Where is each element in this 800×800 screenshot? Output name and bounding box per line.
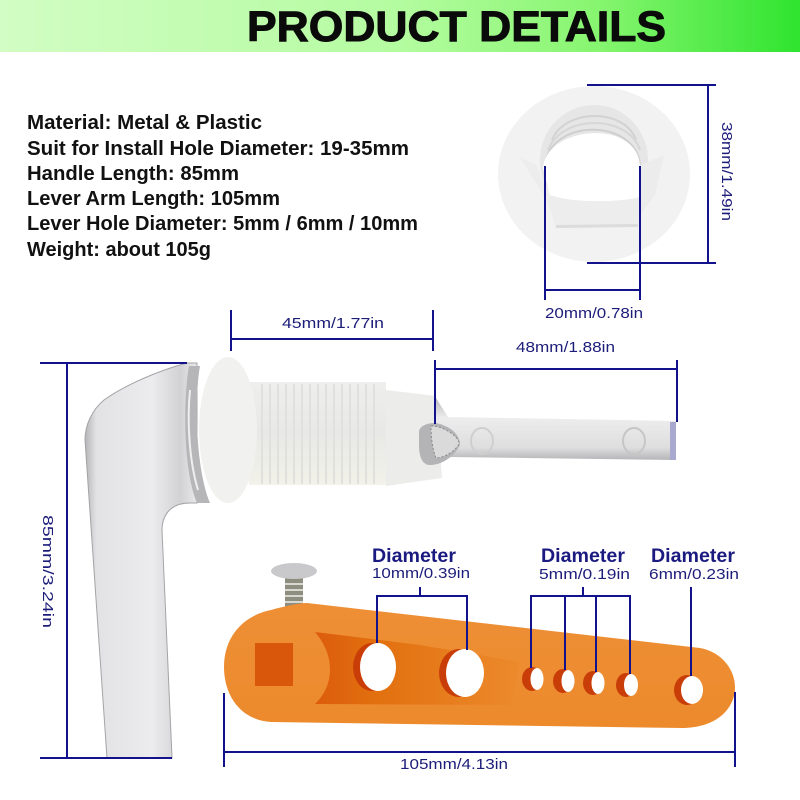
- specification list: Material: Metal & Plastic: [27, 112, 262, 134]
- dimension: nut height: [587, 85, 735, 263]
- label: 10mm holes: 10mm/0.39in: [372, 565, 470, 582]
- header band: [0, 0, 800, 52]
- label: 10mm holes: [372, 546, 470, 650]
- dimension: shaft length: [435, 339, 677, 424]
- dimension: nut height: 38mm/1.49in: [718, 122, 735, 221]
- dimension: lever arm length: 105mm/4.13in: [400, 756, 508, 773]
- dimension: tube length: 45mm/1.77in: [282, 315, 384, 332]
- label: 5mm holes: Diameter: [541, 546, 626, 567]
- specification list: [27, 112, 418, 261]
- dimension: nut hole: [545, 166, 643, 322]
- dimension: nut hole: 20mm/0.78in: [545, 305, 643, 322]
- threaded white tube: [199, 357, 442, 503]
- dimension: lever arm length: [224, 692, 735, 773]
- chrome handle: [85, 363, 210, 758]
- label: 5mm holes: 5mm/0.19in: [539, 566, 630, 583]
- specification list: Weight: about 105g: [27, 239, 211, 261]
- specification list: Lever Arm Length: 105mm: [27, 188, 280, 210]
- metal shaft: [419, 398, 676, 465]
- dimension: handle length: 85mm/3.24in: [39, 515, 56, 628]
- dimension: shaft length: 48mm/1.88in: [516, 339, 615, 356]
- specification list: Suit for Install Hole Diameter: 19-35mm: [27, 138, 409, 160]
- screw: [271, 563, 317, 608]
- label: 10mm holes: Diameter: [372, 546, 457, 567]
- label: 6mm hole: 6mm/0.23in: [649, 566, 739, 583]
- white nut photo: [498, 86, 690, 262]
- dimension: tube length: [231, 310, 433, 351]
- orange lever arm: [224, 603, 735, 728]
- title: PRODUCT DETAILS: [247, 3, 666, 51]
- label: 6mm hole: Diameter: [651, 546, 736, 567]
- label: 5mm holes: [531, 546, 630, 674]
- specification list: Lever Hole Diameter: 5mm / 6mm / 10mm: [27, 213, 418, 235]
- dimension: handle length: [39, 363, 187, 758]
- specification list: Handle Length: 85mm: [27, 163, 239, 185]
- label: 6mm hole: [649, 546, 739, 676]
